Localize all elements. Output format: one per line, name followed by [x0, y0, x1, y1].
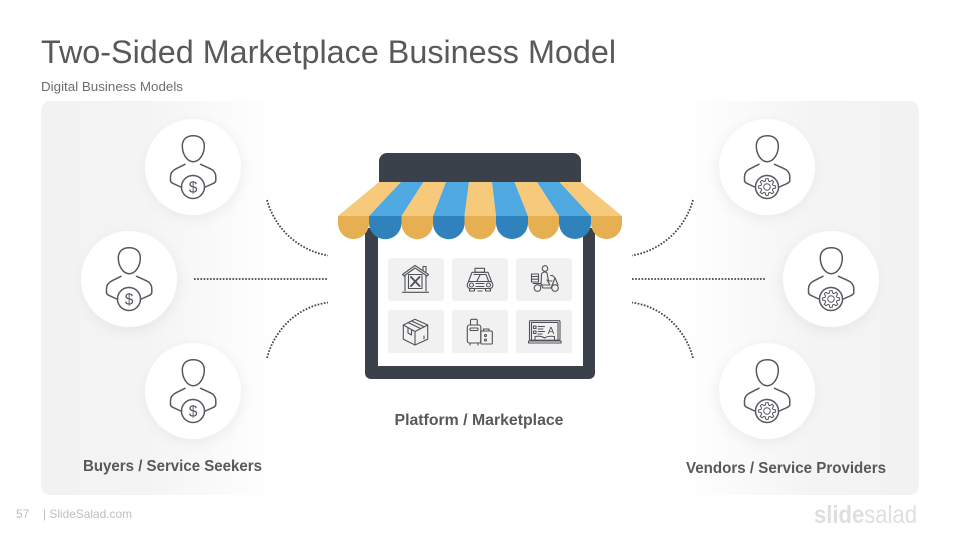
subtitle: Digital Business Models — [41, 80, 183, 94]
page number: 57 — [16, 507, 30, 521]
tile: home repair — [388, 258, 444, 301]
tile: laptop: A — [548, 326, 555, 337]
tile: taxi — [452, 258, 508, 301]
logo: slidesalad — [814, 501, 917, 529]
awning — [338, 182, 622, 239]
connector lines: vendors — [632, 200, 766, 358]
buyer: middle: $ — [125, 292, 134, 308]
label: vendors: Vendors / Service Providers — [686, 460, 886, 477]
vendor: top — [717, 119, 815, 219]
buyer: bottom: $ — [189, 404, 198, 420]
label: platform: Platform / Marketplace — [394, 412, 564, 429]
tile: luggage — [452, 310, 508, 353]
buyer: top — [145, 119, 243, 219]
store interior — [378, 228, 583, 366]
tile: package box — [388, 310, 444, 353]
store sign board — [379, 153, 581, 182]
store body — [365, 228, 595, 379]
buyer: bottom — [145, 343, 243, 443]
storefront — [338, 153, 622, 379]
title: Two-Sided Marketplace Business Model — [41, 34, 616, 70]
background panel — [41, 101, 919, 495]
label: buyers: Buyers / Service Seekers — [83, 458, 262, 475]
buyer: top: $ — [189, 180, 198, 196]
vendor: bottom — [717, 343, 815, 443]
tile: laptop — [516, 310, 572, 353]
vendor: middle — [781, 231, 879, 331]
footer brand: | SlideSalad.com — [43, 507, 132, 521]
buyer: middle — [81, 231, 179, 331]
tile: delivery scooter — [516, 258, 572, 301]
connector lines: buyers — [194, 200, 328, 358]
